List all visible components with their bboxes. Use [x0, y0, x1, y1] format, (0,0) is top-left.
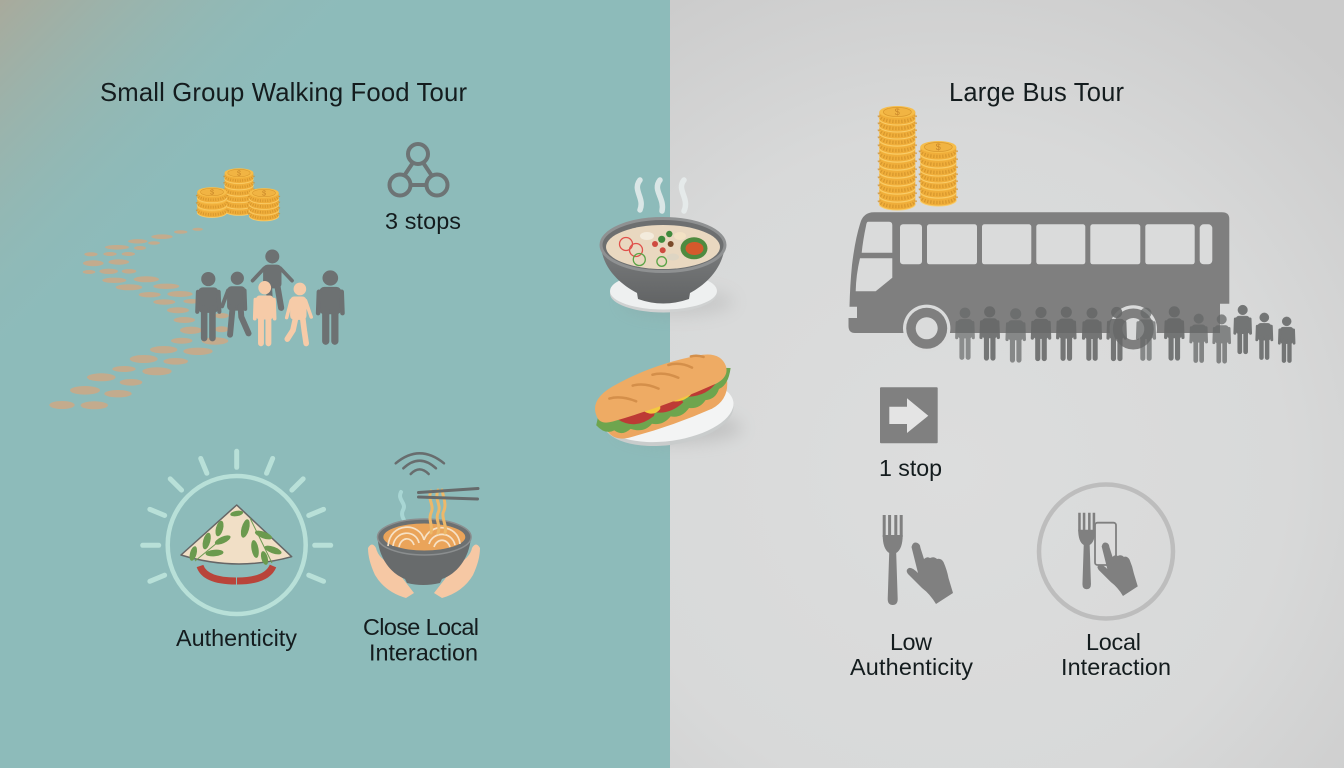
label: 3 stops: 3 stops: [385, 208, 461, 234]
icon: three stops network: [390, 144, 448, 196]
person: light walker: [287, 283, 311, 343]
icon: bus: [848, 212, 1229, 353]
person: dark left: [197, 272, 219, 338]
icon: fork phone and hand in circle: [1039, 484, 1173, 618]
label: close local interaction: Interaction: [369, 640, 478, 666]
icon: one stop arrow box: [880, 387, 938, 443]
icon: rear wheel: [1110, 305, 1157, 353]
label: local interaction: Interaction: [1061, 654, 1171, 680]
icon: authenticity conical hat in glowing circle: [143, 451, 331, 614]
label: close local interaction: Close Local: [363, 614, 479, 640]
person: dark right: [318, 271, 342, 341]
label: 1 stop: 1 stop: [879, 455, 942, 481]
label: local interaction: Local: [1086, 629, 1141, 655]
icon: tall coin stacks: [879, 106, 956, 210]
person: guide with arms out: [253, 250, 292, 308]
label: low authenticity: Low: [890, 629, 932, 655]
heading: small group walking food tour: Small Group Walking Food Tour: [100, 79, 467, 107]
person: light standing: [255, 281, 275, 343]
person: dark walker: [222, 272, 249, 335]
icon: fork and pointing hand: [883, 515, 953, 605]
icon: three small coin stacks: [197, 168, 279, 221]
heading: large bus tour: Large Bus Tour: [949, 79, 1124, 107]
label: low authenticity: Authenticity: [850, 654, 973, 680]
illustration: small walking group of people: [197, 250, 342, 343]
illustration: winding footprint path: [49, 228, 229, 409]
icon: signal waves: [396, 453, 444, 474]
icon: noodle bowl held in hands with signal waves: [368, 453, 480, 598]
label: authenticity: Authenticity: [176, 625, 297, 651]
icon: front wheel: [903, 305, 950, 352]
panel: large bus tour: [848, 79, 1294, 680]
illustration: long line of people: [957, 305, 1294, 361]
panel: small group walking food tour: [0, 0, 670, 768]
panel: background right: [670, 0, 1344, 768]
illustration: baguette sandwich on plate: [585, 347, 742, 454]
illustration: soup bowl on plate with steam: [600, 180, 734, 316]
